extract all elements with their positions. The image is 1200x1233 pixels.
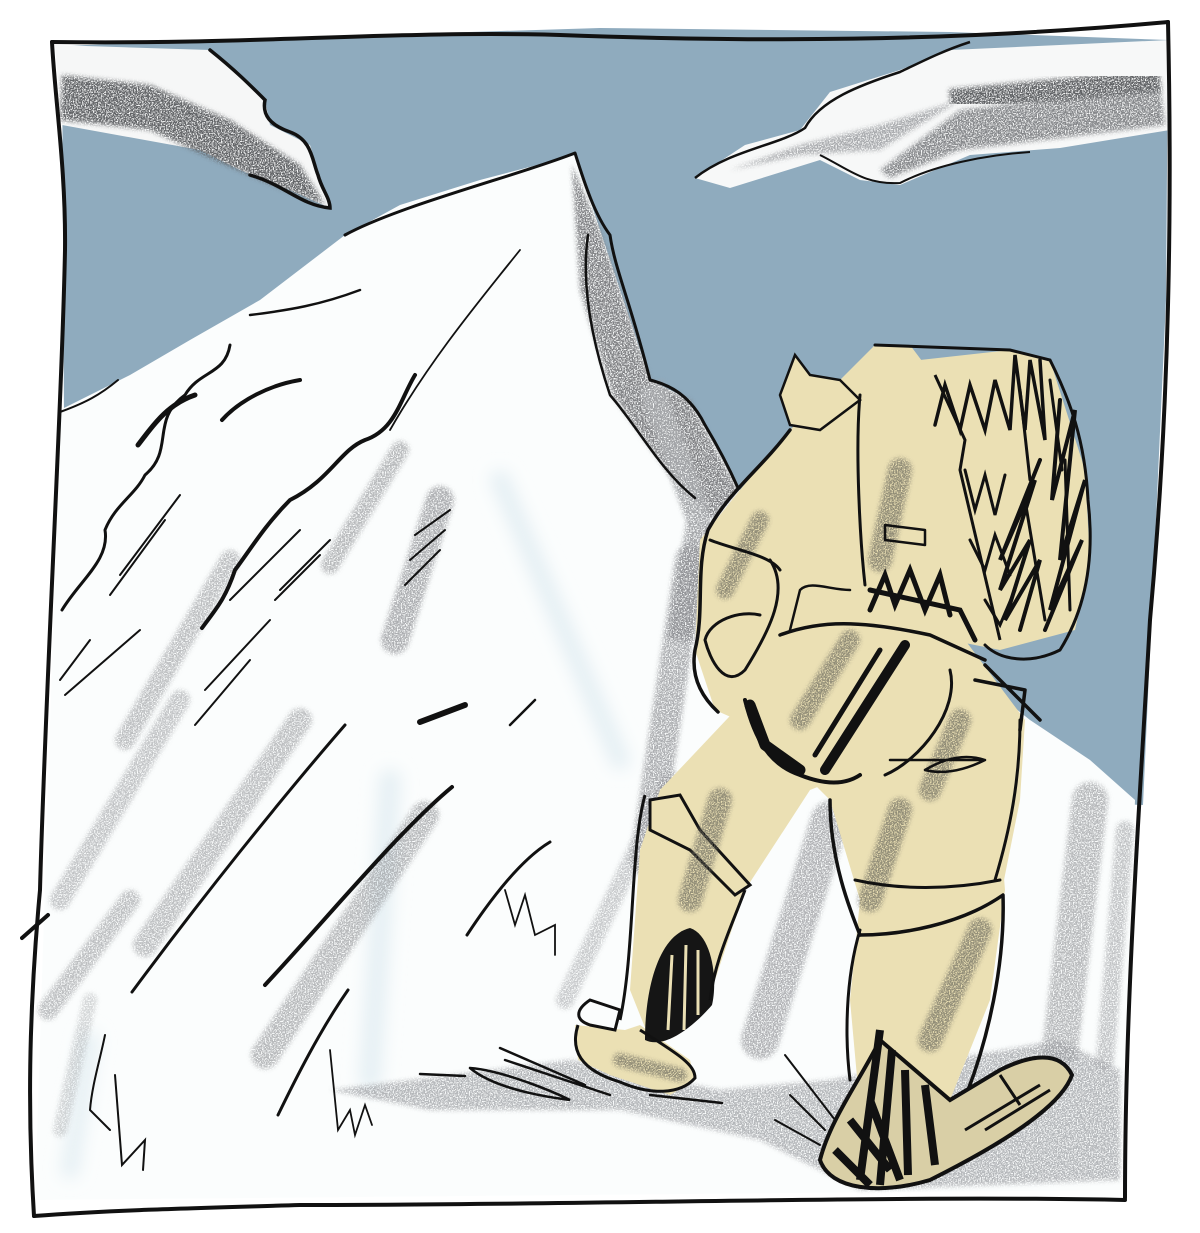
snow scuff marks bbox=[420, 1048, 835, 1145]
mountain ink outline bbox=[60, 153, 738, 628]
hood bbox=[780, 355, 860, 430]
climber bbox=[575, 345, 1090, 1188]
ground shadow bbox=[330, 1040, 1120, 1190]
torso and arm bbox=[695, 345, 1025, 900]
mountain slope strokes bbox=[60, 495, 555, 1170]
gray shaded rock on peak bbox=[572, 165, 738, 640]
figure ink lines bbox=[694, 395, 1040, 1110]
left leg bbox=[575, 700, 860, 1095]
sky bbox=[62, 28, 1168, 805]
right leg bbox=[830, 800, 1005, 1110]
gray pencil shading on mountain bbox=[48, 450, 1125, 1130]
right boot bbox=[820, 1030, 1072, 1188]
snow tint bbox=[70, 480, 620, 1170]
body pencil shading bbox=[620, 470, 980, 1075]
snow field base bbox=[35, 155, 1135, 1200]
backpack bbox=[870, 345, 1090, 659]
right cloud bbox=[695, 40, 1170, 188]
left cloud bbox=[55, 45, 330, 208]
